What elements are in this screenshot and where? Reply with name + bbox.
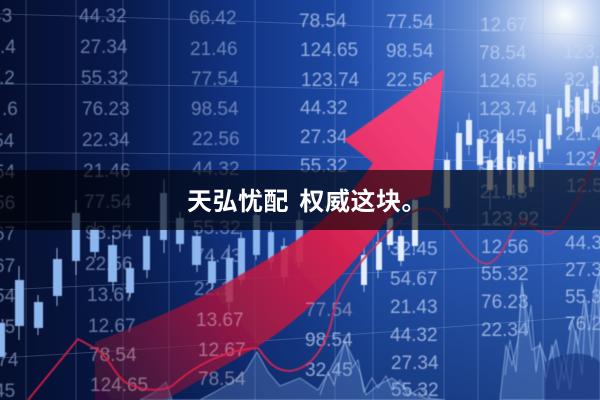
numbers showing through arrow: [89, 300, 353, 396]
number grid right: 124.65: [479, 71, 537, 92]
number grid right: 32.45: [305, 360, 353, 381]
number grid right: 54.67: [390, 269, 438, 290]
number grid left: 77.54: [191, 69, 239, 90]
number grid right: 77.54: [386, 12, 434, 33]
number grid left: 12.67: [88, 316, 136, 337]
number grid left: .6: [2, 99, 18, 120]
numbers showing through arrow: 13.67: [196, 310, 244, 331]
number grid right: 21.43: [480, 182, 528, 203]
number grid right: 21.43: [390, 297, 438, 318]
numbers showing through arrow: 124.65: [90, 375, 148, 396]
number grid right: 27.65: [302, 192, 350, 213]
number grid right: 55.32: [300, 156, 348, 177]
candlesticks: [0, 60, 598, 357]
red trend line: [28, 146, 600, 400]
number grid right: 27.34: [300, 127, 348, 148]
number grid left: 21.46: [190, 39, 238, 60]
number grid left: 93.54: [85, 223, 133, 244]
number grid right: 55.32: [481, 264, 529, 285]
number grid left: 13.67: [87, 285, 135, 306]
number grid left: 22.56: [85, 254, 133, 275]
red rising arrow: [95, 69, 444, 400]
number grid right: 124.65: [300, 40, 358, 61]
number grid right: 44.32: [300, 98, 348, 119]
number grid right: 76.23: [481, 292, 529, 313]
number grid right: 78.54: [479, 43, 527, 64]
number grid right: 32.45: [390, 239, 438, 260]
number grid right: 12.56: [481, 237, 529, 258]
number grid left: 55.32: [193, 218, 241, 239]
number grid right: 78.54: [299, 11, 347, 32]
number grid right: 123.92: [481, 209, 539, 230]
number grid right: 27.34: [391, 353, 439, 374]
number grid left: 76.23: [82, 99, 130, 120]
number grid right: [299, 11, 600, 400]
number grid right: 32.45: [479, 127, 527, 148]
number grid right: 12.67: [480, 15, 528, 36]
number grid right: 22.56: [386, 70, 434, 91]
title: 天弘忧配 权威这块。: [187, 188, 427, 216]
number grid left: 27.34: [80, 37, 128, 58]
number grid left: [0, 6, 242, 400]
numbers showing through arrow: 12.67: [198, 340, 246, 361]
block of dark shading in waveform: [545, 354, 600, 400]
number grid right: 123.74: [479, 99, 538, 120]
number grid left: 22.56: [192, 129, 240, 150]
number grid left: 21.46: [83, 161, 131, 182]
number grid right: 98.54: [305, 330, 353, 351]
number grid left: 22.1: [194, 279, 231, 300]
numbers showing through arrow: 78.54: [89, 345, 137, 366]
number grid right: 123.74: [301, 70, 360, 91]
number grid left: 77.54: [84, 192, 132, 213]
number grid left: 22.34: [82, 130, 130, 151]
dark caption band: [0, 170, 600, 230]
number grid right: 44.32: [390, 325, 438, 346]
number grid left: 44.32: [192, 159, 240, 180]
number grid left: .4: [0, 37, 16, 58]
number grid right: 98.54: [386, 41, 434, 62]
number grid left: 98.54: [191, 99, 239, 120]
number grid right: 54.67: [480, 154, 528, 175]
numbers showing through arrow: 78.54: [198, 369, 246, 390]
numbers showing through arrow: 77.54: [305, 300, 353, 321]
number grid left: 55.32: [81, 68, 129, 89]
number grid right: 22.34: [481, 320, 529, 341]
number grid left: 44.32: [79, 6, 127, 27]
number grid left: 74.43: [194, 246, 242, 267]
waveform chart: [140, 270, 600, 400]
number grid left: 66.42: [189, 8, 237, 29]
